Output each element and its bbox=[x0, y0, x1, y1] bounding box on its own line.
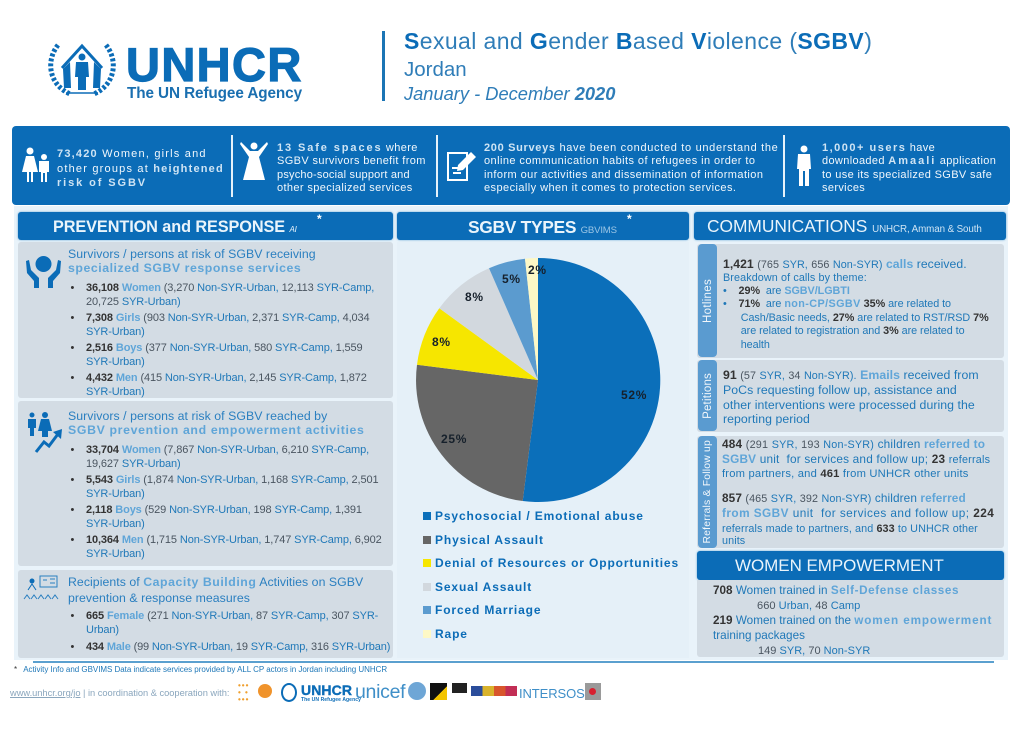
logo: small UNHCR emblem bbox=[281, 683, 297, 702]
panel: SGBV types chart bbox=[397, 242, 689, 658]
logo: INTERSOS: INTERSOS bbox=[519, 686, 585, 701]
period: January - December 2020 bbox=[404, 83, 615, 104]
heading: SGBV types bbox=[397, 212, 689, 240]
icon: hands holding circle bbox=[26, 256, 61, 288]
call breakdown: are related to registration and 3% are related to bbox=[741, 325, 965, 337]
legend: SGBV types bbox=[423, 509, 679, 641]
tab: petitions bbox=[698, 360, 717, 431]
heading: women empowerment: WOMEN EMPOWERMENT bbox=[735, 556, 944, 575]
panel: capacity building bbox=[18, 570, 393, 658]
subheading bbox=[68, 575, 364, 604]
empowerment training: training packages bbox=[713, 629, 805, 642]
tagline: The UN Refugee Agency bbox=[127, 85, 302, 102]
bullet: girls bbox=[86, 473, 378, 501]
footer rule bbox=[33, 661, 994, 663]
figure: safe spaces: other specialized services bbox=[277, 182, 413, 194]
logo: black mark bbox=[452, 683, 467, 693]
bullet: boys bbox=[86, 503, 362, 531]
heading: prevention and response bbox=[18, 212, 393, 240]
call breakdown: Cash/Basic needs, 27% are related to RST/RSD 7% bbox=[741, 312, 989, 324]
pie chart: SGBV types: 2% bbox=[528, 263, 547, 277]
empowerment training: 149 SYR, 70 Non-SYR bbox=[758, 645, 870, 657]
legend: SGBV types: Psychosocial / Emotional abuse bbox=[435, 509, 644, 523]
figure: safe spaces: psycho-social support and bbox=[277, 169, 410, 181]
bullet: women: 33,704 Women (7,867 Non-SYR-Urban, 6,210 SYR-Camp, bbox=[86, 444, 369, 456]
bullet: women bbox=[86, 443, 369, 471]
bullet: female: 665 Female (271 Non-SYR-Urban, 87 SYR-Camp, 307 SYR- bbox=[86, 610, 378, 622]
referrals from SGBV unit: units bbox=[722, 535, 745, 547]
logo: UN Women dots: • • bbox=[238, 688, 249, 697]
bullet: girls bbox=[86, 312, 370, 339]
referrals to SGBV unit: 484 (291 SYR, 193 Non-SYR) children referred to bbox=[722, 437, 985, 451]
key figures band bbox=[12, 126, 1010, 205]
icon: family with rising arrow bbox=[28, 412, 62, 453]
pie chart: SGBV types: 5% bbox=[502, 272, 521, 286]
empowerment training: 219 Women trained on the women empowerment bbox=[713, 614, 992, 627]
title: Sexual and Gender Based Violence (SGBV) bbox=[404, 28, 872, 54]
referrals to SGBV unit: SGBV unit for services and follow up; 23 referrals bbox=[722, 452, 990, 466]
referrals from SGBV unit: from SGBV unit for services and follow up; 224 bbox=[722, 506, 994, 520]
tab: referrals bbox=[698, 436, 717, 548]
footnote: * Activity Info and GBVIMS Data indicate services provided by ALL CP actors in Jordan including UNHCR bbox=[14, 665, 387, 674]
referrals from SGBV unit: referrals made to partners, and 633 to UNHCR other bbox=[722, 523, 978, 535]
subheading: prevention & response measures bbox=[68, 590, 250, 604]
call breakdown: • 29% are SGBV/LGBTI bbox=[723, 285, 850, 297]
self-defense training: 660 Urban, 48 Camp bbox=[757, 600, 860, 612]
calls received: 1,421 (765 SYR, 656 Non-SYR) calls received. bbox=[723, 257, 967, 271]
logo: UN Women dots: ••• bbox=[238, 681, 249, 690]
bullet: female bbox=[86, 610, 378, 637]
figure: women and girls: 73,420 Women, girls and bbox=[57, 148, 207, 160]
title rule bbox=[382, 31, 385, 101]
bullet: women bbox=[86, 282, 374, 309]
panel: women empowerment bbox=[697, 580, 1004, 657]
icon: trainer and audience bbox=[24, 576, 58, 600]
bullet: women: 19,627 SYR-Urban) bbox=[86, 458, 181, 470]
heading: SGBV types: SGBV TYPES GBVIMS bbox=[468, 217, 617, 237]
bullet: girls: 7,308 Girls (903 Non-SYR-Urban, 2,371 SYR-Camp, 4,034 bbox=[86, 312, 370, 324]
subheading: Recipients of Capacity Building Activities on SGBV bbox=[68, 575, 363, 589]
logo: colored band bbox=[471, 686, 517, 696]
bullet: women: 20,725 SYR-Urban) bbox=[86, 296, 181, 308]
logo: UN Women dots: ••• bbox=[238, 695, 249, 704]
heading: SGBV types: * bbox=[627, 212, 632, 226]
petitions text: reporting period bbox=[723, 412, 810, 426]
logo: UNFPA bbox=[258, 684, 272, 698]
referrals from SGBV unit bbox=[722, 491, 994, 547]
call breakdown: Breakdown of calls by theme: bbox=[723, 272, 867, 284]
figure: surveys: 200 Surveys have been conducted to understand the bbox=[484, 142, 778, 154]
figure: surveys: online communication habits of refugees in order to bbox=[484, 155, 755, 167]
figure: app users: to use its specialized SGBV safe bbox=[822, 169, 992, 181]
call breakdown bbox=[723, 272, 989, 351]
subheading: SGBV prevention and empowerment activities bbox=[68, 423, 365, 437]
logo: UNHCR bbox=[301, 682, 361, 703]
subheading bbox=[68, 247, 316, 275]
figure: app users: 1,000+ users have bbox=[822, 142, 935, 154]
subheading bbox=[68, 409, 365, 437]
figure: surveys: especially when it comes to protection services. bbox=[484, 182, 736, 194]
subheading: specialized SGBV response services bbox=[68, 261, 301, 275]
self-defense training bbox=[713, 584, 959, 612]
figure: surveys: inform our activities and dissemination of information bbox=[484, 169, 763, 181]
logo: UNHCR: The UN Refugee Agency bbox=[301, 697, 361, 703]
icon: woman and child bbox=[22, 148, 49, 182]
footer: website and coordination text: www.unhcr.org/jo | in coordination & cooperation with: bbox=[10, 688, 229, 698]
petitions text: 91 (57 SYR, 34 Non-SYR). Emails received from bbox=[723, 368, 979, 382]
logo: unicef: unicef bbox=[355, 681, 405, 703]
legend: SGBV types: Physical Assault bbox=[435, 533, 544, 547]
pie chart: SGBV types: 52% bbox=[621, 388, 647, 402]
panel: petitions bbox=[697, 360, 1004, 432]
title block bbox=[404, 28, 872, 104]
heading: prevention and response: PREVENTION and RESPONSE AI bbox=[53, 218, 297, 236]
heading: prevention and response: * bbox=[317, 212, 322, 226]
figure: women and girls: risk of SGBV bbox=[57, 177, 147, 189]
tab: hotlines: Hotlines bbox=[702, 279, 714, 322]
bullet: men: SYR-Urban) bbox=[86, 386, 145, 398]
figure: safe spaces: SGBV survivors benefit from bbox=[277, 155, 426, 167]
panel: hotlines bbox=[697, 244, 1004, 358]
bullet: men: 10,364 Men (1,715 Non-SYR-Urban, 1,747 SYR-Camp, 6,902 bbox=[86, 534, 382, 546]
figure: women and girls: other groups at heightened bbox=[57, 162, 224, 174]
bullet: boys: SYR-Urban) bbox=[86, 356, 145, 368]
heading: women empowerment bbox=[697, 551, 1004, 580]
panel: specialized response services bbox=[18, 242, 393, 398]
figure: women and girls bbox=[57, 148, 224, 189]
content background bbox=[14, 206, 1008, 660]
referrals from SGBV unit: 857 (465 SYR, 392 Non-SYR) children referred bbox=[722, 491, 966, 505]
figure: safe spaces bbox=[277, 142, 426, 194]
heading: communications bbox=[694, 212, 1006, 240]
bullet: girls: 5,543 Girls (1,874 Non-SYR-Urban, 1,168 SYR-Camp, 2,501 bbox=[86, 474, 378, 486]
icon: woman with raised arms bbox=[240, 142, 268, 180]
bullet: men bbox=[86, 533, 382, 561]
icon: survey form and pen bbox=[447, 152, 476, 181]
call breakdown: health bbox=[741, 339, 770, 351]
legend: SGBV types: Forced Marriage bbox=[435, 603, 541, 617]
call breakdown: • 71% are non-CP/SGBV 35% are related to bbox=[723, 298, 951, 310]
wordmark: UNHCR bbox=[126, 38, 303, 91]
logo: UNHCR emblem and wordmark bbox=[48, 38, 303, 102]
bullet: men bbox=[86, 372, 367, 399]
bullet: boys: 2,118 Boys (529 Non-SYR-Urban, 198 SYR-Camp, 1,391 bbox=[86, 504, 362, 516]
logo: UN Women dots bbox=[238, 681, 249, 704]
tab: petitions: Petitions bbox=[702, 373, 714, 418]
bullet: male: 434 Male (99 Non-SYR-Urban, 19 SYR-Camp, 316 SYR-Urban) bbox=[86, 641, 390, 653]
empowerment training bbox=[713, 614, 992, 657]
pie chart: SGBV types: 8% bbox=[465, 290, 484, 304]
heading: communications: COMMUNICATIONS UNHCR, Amman & South bbox=[707, 216, 982, 236]
legend: SGBV types: Rape bbox=[435, 627, 468, 641]
subheading: Survivors / persons at risk of SGBV reached by bbox=[68, 409, 327, 423]
petitions text: other interventions were processed during the bbox=[723, 398, 975, 412]
tab: referrals: Referrals & Follow up bbox=[702, 440, 713, 544]
legend: SGBV types: Sexual Assault bbox=[435, 580, 532, 594]
legend: SGBV types: Denial of Resources or Opportunities bbox=[435, 556, 679, 570]
bullet: boys: SYR-Urban) bbox=[86, 518, 145, 530]
pie chart: SGBV types: 8% bbox=[432, 335, 451, 349]
referrals to SGBV unit bbox=[722, 437, 990, 480]
icon: person bbox=[797, 146, 811, 186]
logo: grey square bbox=[585, 683, 601, 700]
panel: prevention and empowerment activities bbox=[18, 401, 393, 566]
panel: referrals and follow up bbox=[697, 436, 1004, 548]
bullet: men: SYR-Urban) bbox=[86, 548, 145, 560]
bullet: boys: 2,516 Boys (377 Non-SYR-Urban, 580 SYR-Camp, 1,559 bbox=[86, 342, 363, 354]
tab: hotlines bbox=[698, 244, 717, 357]
self-defense training: 708 Women trained in Self-Defense classes bbox=[713, 584, 959, 597]
figure: app users: services bbox=[822, 182, 865, 194]
location: Jordan bbox=[404, 58, 467, 81]
logo: UNHCR: UNHCR bbox=[301, 682, 352, 698]
footer: partner logos bbox=[238, 681, 601, 704]
logo: black and yellow square bbox=[430, 683, 447, 700]
petitions text: PoCs requesting follow up, assistance and bbox=[723, 383, 957, 397]
figure: surveys bbox=[484, 142, 778, 194]
bullet: boys bbox=[86, 342, 363, 369]
bullet: female: Urban) bbox=[86, 624, 119, 636]
bullet: girls: SYR-Urban) bbox=[86, 326, 145, 338]
bullet: girls: SYR-Urban) bbox=[86, 488, 145, 500]
petitions text bbox=[723, 368, 979, 426]
subheading: Survivors / persons at risk of SGBV receiving bbox=[68, 247, 316, 261]
figure: app users: downloaded Amaali application bbox=[822, 155, 996, 167]
logo: unicef globe bbox=[408, 682, 426, 700]
bullet: men: 4,432 Men (415 Non-SYR-Urban, 2,145 SYR-Camp, 1,872 bbox=[86, 372, 367, 384]
figure: safe spaces: 13 Safe spaces where bbox=[277, 142, 418, 154]
figure: app users bbox=[822, 142, 996, 194]
pie chart: SGBV types: 25% bbox=[441, 432, 467, 446]
bullet: women: 36,108 Women (3,270 Non-SYR-Urban, 12,113 SYR-Camp, bbox=[86, 282, 374, 294]
referrals to SGBV unit: from partners, and 461 from UNHCR other units bbox=[722, 468, 969, 480]
icon: UNHCR laurel emblem bbox=[48, 44, 116, 96]
